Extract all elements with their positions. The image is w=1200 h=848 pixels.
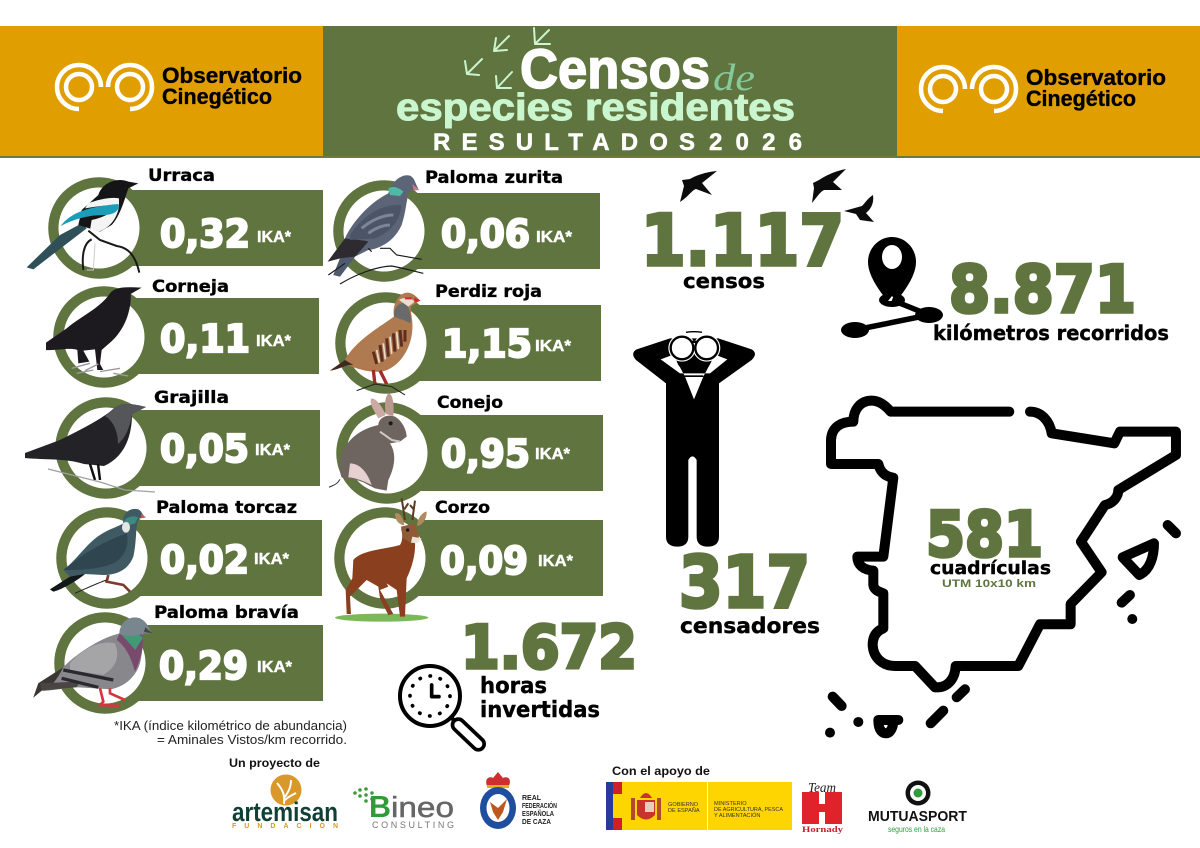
value: 0,06 — [441, 212, 530, 256]
logo: Fundación Artemisan: FUNDACIÓN — [232, 821, 338, 830]
logo left: Observatorio Cinegético: Cinegético — [162, 84, 272, 109]
species name: Corzo — [435, 498, 490, 518]
species name: Conejo — [437, 393, 503, 413]
stat: censos: 1.117 — [641, 200, 844, 282]
unit: IKA* — [257, 229, 292, 246]
logo: Fundación Artemisan: artemisan — [232, 797, 338, 827]
heading: Un proyecto de: Un proyecto de — [229, 756, 320, 770]
illustration: stock dove — [328, 175, 423, 284]
species name: Perdiz roja — [435, 282, 542, 302]
logo: Real Federación Española de Caza: REAL — [522, 795, 542, 802]
illustration: rock dove — [33, 617, 152, 706]
footnote: = Aminales Vistos/km recorrido. — [157, 732, 347, 747]
stat: kilómetros recorridos: 8.871 — [949, 253, 1136, 328]
stat: horas invertidas: 1.672 — [461, 613, 637, 683]
logo: Gobierno de España: GOBIERNO — [668, 802, 699, 808]
illustration: jackdaw — [25, 404, 155, 492]
unit: IKA* — [257, 659, 293, 676]
panel: Paloma torcaz — [50, 498, 322, 604]
title: especies residentes — [396, 87, 795, 129]
logo: Bineo Consulting: ineo — [391, 792, 454, 824]
footnote — [114, 718, 347, 747]
logo: Mutuasport — [868, 780, 967, 834]
unit: IKA* — [536, 229, 573, 246]
map of Spain — [825, 401, 1176, 738]
logo: Gobierno de España: DE AGRICULTURA, PESCA — [714, 807, 783, 813]
panel: Corzo — [335, 498, 603, 622]
logo: Gobierno de España: MINISTERIO — [714, 801, 747, 807]
unit: IKA* — [535, 338, 572, 355]
icon: magnifier with clock — [400, 666, 478, 744]
logo: Real Federación Española de Caza: FEDERACIÓN — [522, 801, 557, 810]
illustration: roe deer — [335, 498, 428, 622]
logo: Team Hornady — [802, 781, 844, 834]
species name: Paloma zurita — [425, 168, 563, 188]
icon: map pin with route — [841, 237, 943, 338]
unit: IKA* — [254, 551, 290, 568]
panel: Urraca — [27, 166, 323, 274]
value: 0,29 — [159, 644, 248, 688]
value: 0,32 — [160, 212, 250, 256]
logo right: Observatorio Cinegético — [921, 65, 1166, 111]
illustration: crow — [46, 287, 142, 376]
title: Censos — [520, 37, 710, 100]
stat: censadores: censadores — [680, 614, 820, 638]
footnote: *IKA (índice kilométrico de abundancia) — [114, 718, 347, 733]
logo: Bineo Consulting — [353, 787, 454, 830]
icon: bird footprints — [465, 28, 550, 88]
stat: horas invertidas: invertidas — [480, 698, 600, 723]
species name: Paloma bravía — [154, 603, 299, 623]
logo: Real Federación Española de Caza: DE CAZA — [522, 819, 551, 826]
logo: Gobierno de España: Y ALIMENTACIÓN — [714, 812, 760, 819]
logo: Team Hornady: Hornady — [802, 824, 844, 834]
stat: cuadrículas: UTM 10x10 km — [942, 578, 1036, 590]
header band — [0, 26, 1200, 158]
stat: horas invertidas — [461, 613, 637, 723]
logo right: Observatorio Cinegético: Cinegético — [1026, 86, 1136, 111]
unit: IKA* — [535, 446, 571, 463]
illustration: wood pigeon — [50, 509, 146, 593]
logo: Mutuasport: MUTUASPORT — [868, 808, 967, 825]
panel: Paloma zurita — [328, 168, 600, 284]
panel: Grajilla — [25, 388, 320, 494]
stat: kilómetros recorridos: kilómetros recorridos — [933, 321, 1169, 345]
logo: Gobierno de España: DE ESPAÑA — [668, 807, 700, 814]
title — [396, 37, 802, 156]
logo: Fundación Artemisan — [232, 774, 338, 830]
illustration: magpie — [27, 180, 139, 273]
panel: Conejo — [329, 393, 603, 498]
unit: IKA* — [255, 442, 291, 459]
stat: cuadrículas: 581 — [926, 498, 1043, 571]
value: 0,05 — [160, 427, 249, 471]
stat: horas invertidas: horas — [480, 674, 547, 699]
heading: Con el apoyo de: Con el apoyo de — [612, 764, 710, 778]
value: 0,02 — [160, 538, 249, 582]
value: 0,95 — [441, 432, 530, 476]
logo: Mutuasport: seguros en la caza — [888, 825, 945, 834]
logo right: Observatorio Cinegético: Observatorio — [1026, 65, 1166, 90]
logo: Real Federación Española de Caza — [480, 772, 557, 829]
illustration: red-legged partridge — [330, 293, 421, 395]
logo left: Observatorio Cinegético: Observatorio — [162, 63, 302, 88]
species name: Urraca — [148, 166, 215, 186]
species name: Grajilla — [154, 388, 229, 408]
panel: Paloma bravía — [33, 603, 323, 708]
logo: Bineo Consulting: B — [369, 789, 391, 824]
title: 2026 — [709, 129, 802, 156]
logo: Gobierno de España — [606, 782, 792, 830]
logo left: Observatorio Cinegético — [57, 63, 302, 109]
unit: IKA* — [256, 333, 292, 350]
title: de — [713, 57, 755, 99]
stat: cuadrículas: cuadrículas — [930, 558, 1051, 579]
panel: Perdiz roja — [330, 282, 601, 395]
icon: flying birds — [680, 169, 874, 222]
logo: Real Federación Española de Caza: ESPAÑOLA — [522, 809, 554, 818]
logo: Team Hornady: Team — [808, 781, 836, 796]
species name: Paloma torcaz — [156, 498, 297, 518]
illustration: rabbit — [329, 393, 407, 491]
value: 1,15 — [442, 322, 532, 366]
stat: censos: censos — [683, 269, 765, 293]
value: 0,09 — [440, 539, 528, 583]
value: 0,11 — [160, 317, 250, 361]
species name: Corneja — [152, 277, 229, 297]
title: RESULTADOS — [433, 129, 695, 156]
panel: Corneja — [46, 277, 319, 382]
icon: person with binoculars — [633, 332, 755, 547]
stat: censadores: 317 — [679, 541, 810, 624]
logo: Bineo Consulting: CONSULTING — [372, 820, 454, 830]
unit: IKA* — [538, 553, 574, 570]
